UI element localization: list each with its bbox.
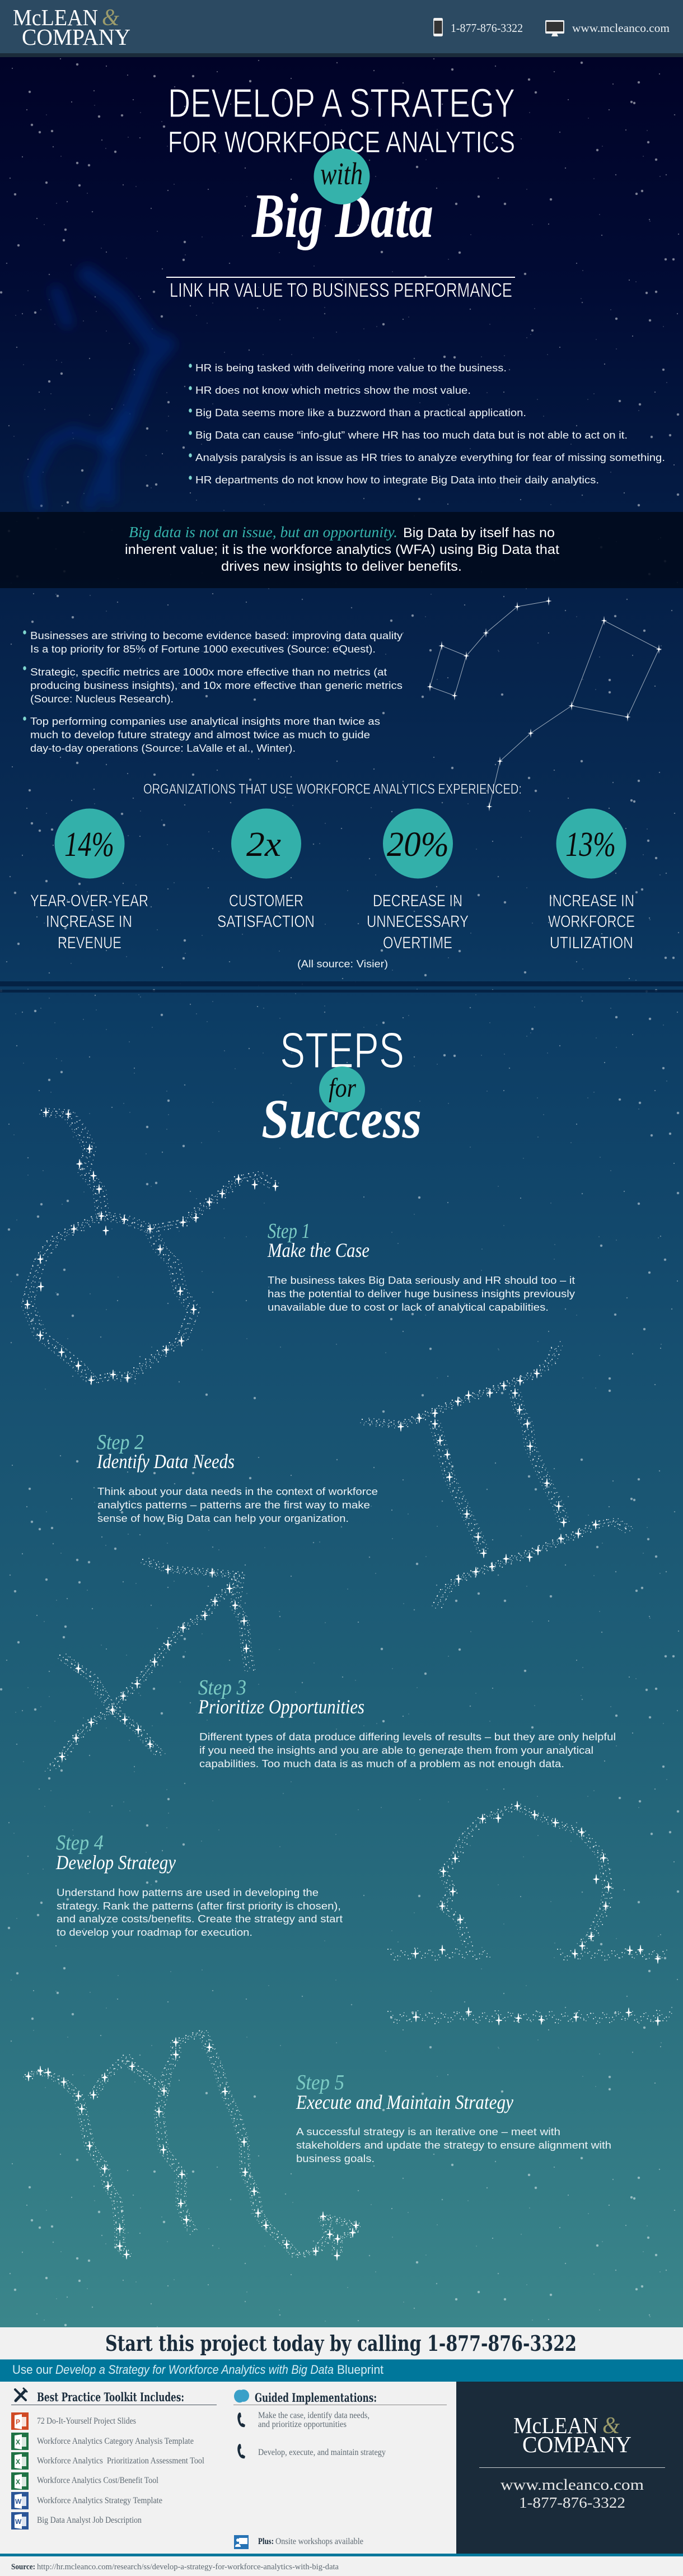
icon: heads (234, 2389, 249, 2403)
item: slides (11, 2412, 136, 2430)
issue bullet list: Analysis paralysis is an issue as HR tries to analyze everything for fear of missing something. (195, 451, 665, 463)
step 1: has the potential to deliver huge business insights previously (268, 1288, 576, 1299)
teal circle with "with" (314, 148, 369, 204)
big data script: Big Data (251, 181, 433, 251)
footer panel (0, 2327, 683, 2576)
evidence bullet list: (Source: Nucleus Research). (30, 693, 174, 705)
step 5: Execute and Maintain Strategy (296, 2091, 513, 2113)
icon: monitor (545, 20, 564, 36)
step 5 (296, 2071, 611, 2164)
issue bullet list: Big Data can cause “info-glut” where HR has too much data but is not able to act on it. (195, 429, 628, 441)
step 4: to develop your roadmap for execution. (57, 1926, 252, 1938)
stat: 14% revenue: REVENUE (58, 934, 121, 952)
icon: phone call 2 (237, 2444, 245, 2458)
footer logo (513, 2412, 631, 2457)
icon: workshop (234, 2535, 249, 2549)
stat: 13% utilization: 13% (565, 826, 616, 864)
constellation: gemini (361, 1341, 635, 1608)
stat: 20% overtime: OVERTIME (383, 934, 452, 952)
logo (13, 4, 130, 50)
header bar (0, 0, 683, 57)
stat: 14% revenue: INCREASE IN (46, 912, 132, 931)
evidence bullet list (23, 630, 403, 754)
constellation: libra (388, 1801, 673, 2025)
step 5: business goals. (296, 2153, 375, 2164)
evidence bullet list: much to develop future strategy and almost twice as much to guide (30, 729, 370, 740)
step 3 (198, 1676, 616, 1769)
phone number: 1-877-876-3322 (451, 21, 523, 35)
constellation: sagittarius (45, 1558, 255, 1773)
blueprint band: Develop a Strategy for Workforce Analytics with Big Data (55, 2363, 334, 2377)
step 1: unavailable due to cost or lack of analytical capabilities. (268, 1301, 549, 1313)
call 1 text: Make the case, identify data needs, (258, 2411, 369, 2420)
subtitle: LINK HR VALUE TO BUSINESS PERFORMANCE (170, 280, 512, 301)
constellation: scorpio (24, 2030, 361, 2261)
step 4: and analyze costs/benefits. Create the strategy and start (57, 1913, 343, 1925)
stat: 14% revenue: YEAR-OVER-YEAR (30, 892, 148, 910)
source line: http://hr.mcleanco.com/research/ss/develop-a-strategy-for-workforce-analytics-with-big-data (37, 2563, 339, 2572)
step 4: Step 4 (56, 1831, 104, 1855)
constellation: taurus (21, 1108, 282, 1385)
icon: phone call 1 (237, 2412, 245, 2427)
source line: Source: (11, 2563, 35, 2572)
item: prioritization tool: Workforce Analytics Prioritization Assessment Tool (37, 2456, 204, 2466)
step 3: Different types of data produce differing levels of results – but they are only helpful (199, 1731, 616, 1743)
step 4 (55, 1831, 343, 1938)
item: strategy template (11, 2492, 162, 2509)
stat: 13% utilization: UTILIZATION (550, 934, 633, 952)
success script: Success (261, 1088, 422, 1150)
blueprint band: Use our (12, 2363, 53, 2377)
step 2: Step 2 (97, 1431, 144, 1454)
item: slides: P (16, 2418, 20, 2426)
logo: COMPANY (22, 24, 130, 50)
item: category template: Workforce Analytics Category Analysis Template (37, 2437, 194, 2446)
stat: 13% utilization (548, 809, 635, 952)
stat: 13% utilization: WORKFORCE (548, 912, 635, 931)
evidence bullet list: Is a top priority for 85% of Fortune 1000 executives (Source: eQuest). (30, 643, 376, 655)
step 2: Identify Data Needs (96, 1450, 235, 1473)
icon: tools (15, 2388, 27, 2401)
guided implementations column (233, 2389, 447, 2549)
stat: 2x satisfaction: CUSTOMER (229, 892, 303, 910)
step 5: A successful strategy is an iterative one – meet with (296, 2126, 560, 2137)
step 4: Understand how patterns are used in developing the (57, 1886, 319, 1898)
plus workshops text: Plus: (258, 2537, 274, 2546)
stat: 20% overtime: 20% (387, 826, 449, 864)
step 3: Prioritize Opportunities (198, 1695, 364, 1718)
stat: 14% revenue: 14% (64, 826, 114, 864)
item: strategy template: W (15, 2498, 22, 2505)
footer logo: & (602, 2413, 620, 2439)
callout band: inherent value; it is the workforce analytics (WFA) using Big Data that (125, 542, 559, 557)
issue bullet list: HR is being tasked with delivering more value to the business. (195, 362, 507, 374)
step 3: capabilities. Too much data is as much of a problem as not enough data. (199, 1758, 564, 1769)
issue bullet list: HR departments do not know how to integrate Big Data into their daily analytics. (195, 474, 599, 486)
footer logo: COMPANY (522, 2431, 631, 2457)
teal circle with "for": for (329, 1073, 356, 1103)
step 2: sense of how Big Data can help your organization. (97, 1512, 349, 1524)
stats heading: ORGANIZATIONS THAT USE WORKFORCE ANALYTICS EXPERIENCED: (143, 781, 522, 797)
step 1: Make the Case (267, 1239, 369, 1261)
footer website: www.mcleanco.com (500, 2476, 644, 2493)
guided heading: Guided Implementations: (255, 2391, 377, 2405)
plus workshops text: Onsite workshops available (275, 2537, 363, 2546)
item: category template (11, 2433, 194, 2450)
step 5: stakeholders and update the strategy to ensure alignment with (296, 2139, 611, 2151)
stat: 14% revenue (30, 809, 148, 952)
toolkit heading: Best Practice Toolkit Includes: (37, 2390, 184, 2404)
title (166, 81, 515, 301)
callout band: Big data is not an issue, but an opportunity. (129, 524, 397, 541)
stat: 20% overtime: DECREASE IN (373, 892, 462, 910)
item: cost benefit tool (11, 2472, 158, 2490)
logo: & (102, 5, 119, 31)
issue bullet list: Big Data seems more like a buzzword than a practical application. (195, 407, 526, 418)
item: strategy template: Workforce Analytics Strategy Template (37, 2496, 162, 2505)
step 4: Develop Strategy (55, 1851, 176, 1874)
title: FOR WORKFORCE ANALYTICS (168, 125, 515, 159)
steps heading: STEPS (280, 1023, 404, 1079)
step 5: Step 5 (296, 2071, 344, 2094)
footer phone: 1-877-876-3322 (519, 2494, 625, 2511)
stat: 2x satisfaction: SATISFACTION (217, 912, 315, 931)
step 3: Step 3 (198, 1676, 246, 1699)
icon: phone (433, 18, 443, 36)
logo: McLEAN (13, 4, 98, 30)
step 2: Think about your data needs in the context of workforce (97, 1485, 378, 1497)
stat: 2x satisfaction: 2x (246, 826, 281, 864)
item: job description: W (15, 2518, 22, 2526)
step 1: Step 1 (268, 1219, 310, 1243)
item: cost benefit tool: X (16, 2478, 20, 2486)
issue bullet list (189, 362, 665, 486)
stats source: (All source: Visier) (297, 958, 388, 970)
item: job description: Big Data Analyst Job Description (37, 2516, 142, 2525)
item: cost benefit tool: Workforce Analytics Cost/Benefit Tool (37, 2476, 158, 2485)
item: prioritization tool (11, 2452, 204, 2470)
step 1: The business takes Big Data seriously and HR should too – it (268, 1274, 575, 1286)
steps heading (261, 1023, 422, 1150)
stat: 20% overtime: UNNECESSARY (367, 912, 469, 931)
evidence bullet list: Top performing companies use analytical insights more than twice as (30, 715, 380, 727)
contact panel (456, 2382, 683, 2554)
issue bullet list: HR does not know which metrics show the most value. (195, 384, 471, 396)
step 3: if you need the insights and you are able to generate them from your analytical (199, 1744, 593, 1756)
callout band (0, 512, 683, 588)
call 2 text: Develop, execute, and maintain strategy (258, 2448, 386, 2457)
website: www.mcleanco.com (572, 21, 670, 35)
step 1 (267, 1219, 576, 1313)
step 2: analytics patterns – patterns are the first way to make (97, 1499, 370, 1511)
item: prioritization tool: X (16, 2458, 20, 2466)
item: category template: X (16, 2438, 20, 2446)
line constellation (427, 596, 662, 811)
callout band: Big Data by itself has no (403, 525, 555, 541)
step 4: strategy. Rank the patterns (after first priority is chosen), (57, 1900, 341, 1912)
step 2 (96, 1431, 378, 1524)
blueprint band: Blueprint (337, 2363, 383, 2377)
title: DEVELOP A STRATEGY (168, 81, 515, 126)
call 1 text: and prioritize opportunities (258, 2420, 347, 2429)
stat: 13% utilization: INCREASE IN (549, 892, 634, 910)
item: slides: 72 Do-It-Yourself Project Slides (37, 2416, 136, 2426)
call 1 text (258, 2411, 369, 2429)
teal circle with "with": with (320, 157, 363, 192)
blueprint band (0, 2359, 683, 2382)
evidence bullet list: day-to-day operations (Source: LaValle et al., Winter). (30, 742, 296, 754)
faint constellation figure behind bullets (34, 274, 166, 507)
toolkit column (11, 2388, 217, 2530)
item: job description (11, 2512, 142, 2530)
stat: 20% overtime (367, 809, 469, 952)
footer logo: McLEAN (513, 2412, 598, 2438)
callout band: drives new insights to deliver benefits. (221, 559, 462, 574)
stat: 2x satisfaction (217, 809, 315, 931)
evidence bullet list: Businesses are striving to become evidence based: improving data quality (30, 630, 403, 641)
evidence bullet list: Strategic, specific metrics are 1000x more effective than no metrics (at (30, 666, 387, 678)
evidence bullet list: producing business insights), and 10x more effective than generic metrics (30, 679, 403, 691)
teal circle with "for" (319, 1066, 365, 1112)
